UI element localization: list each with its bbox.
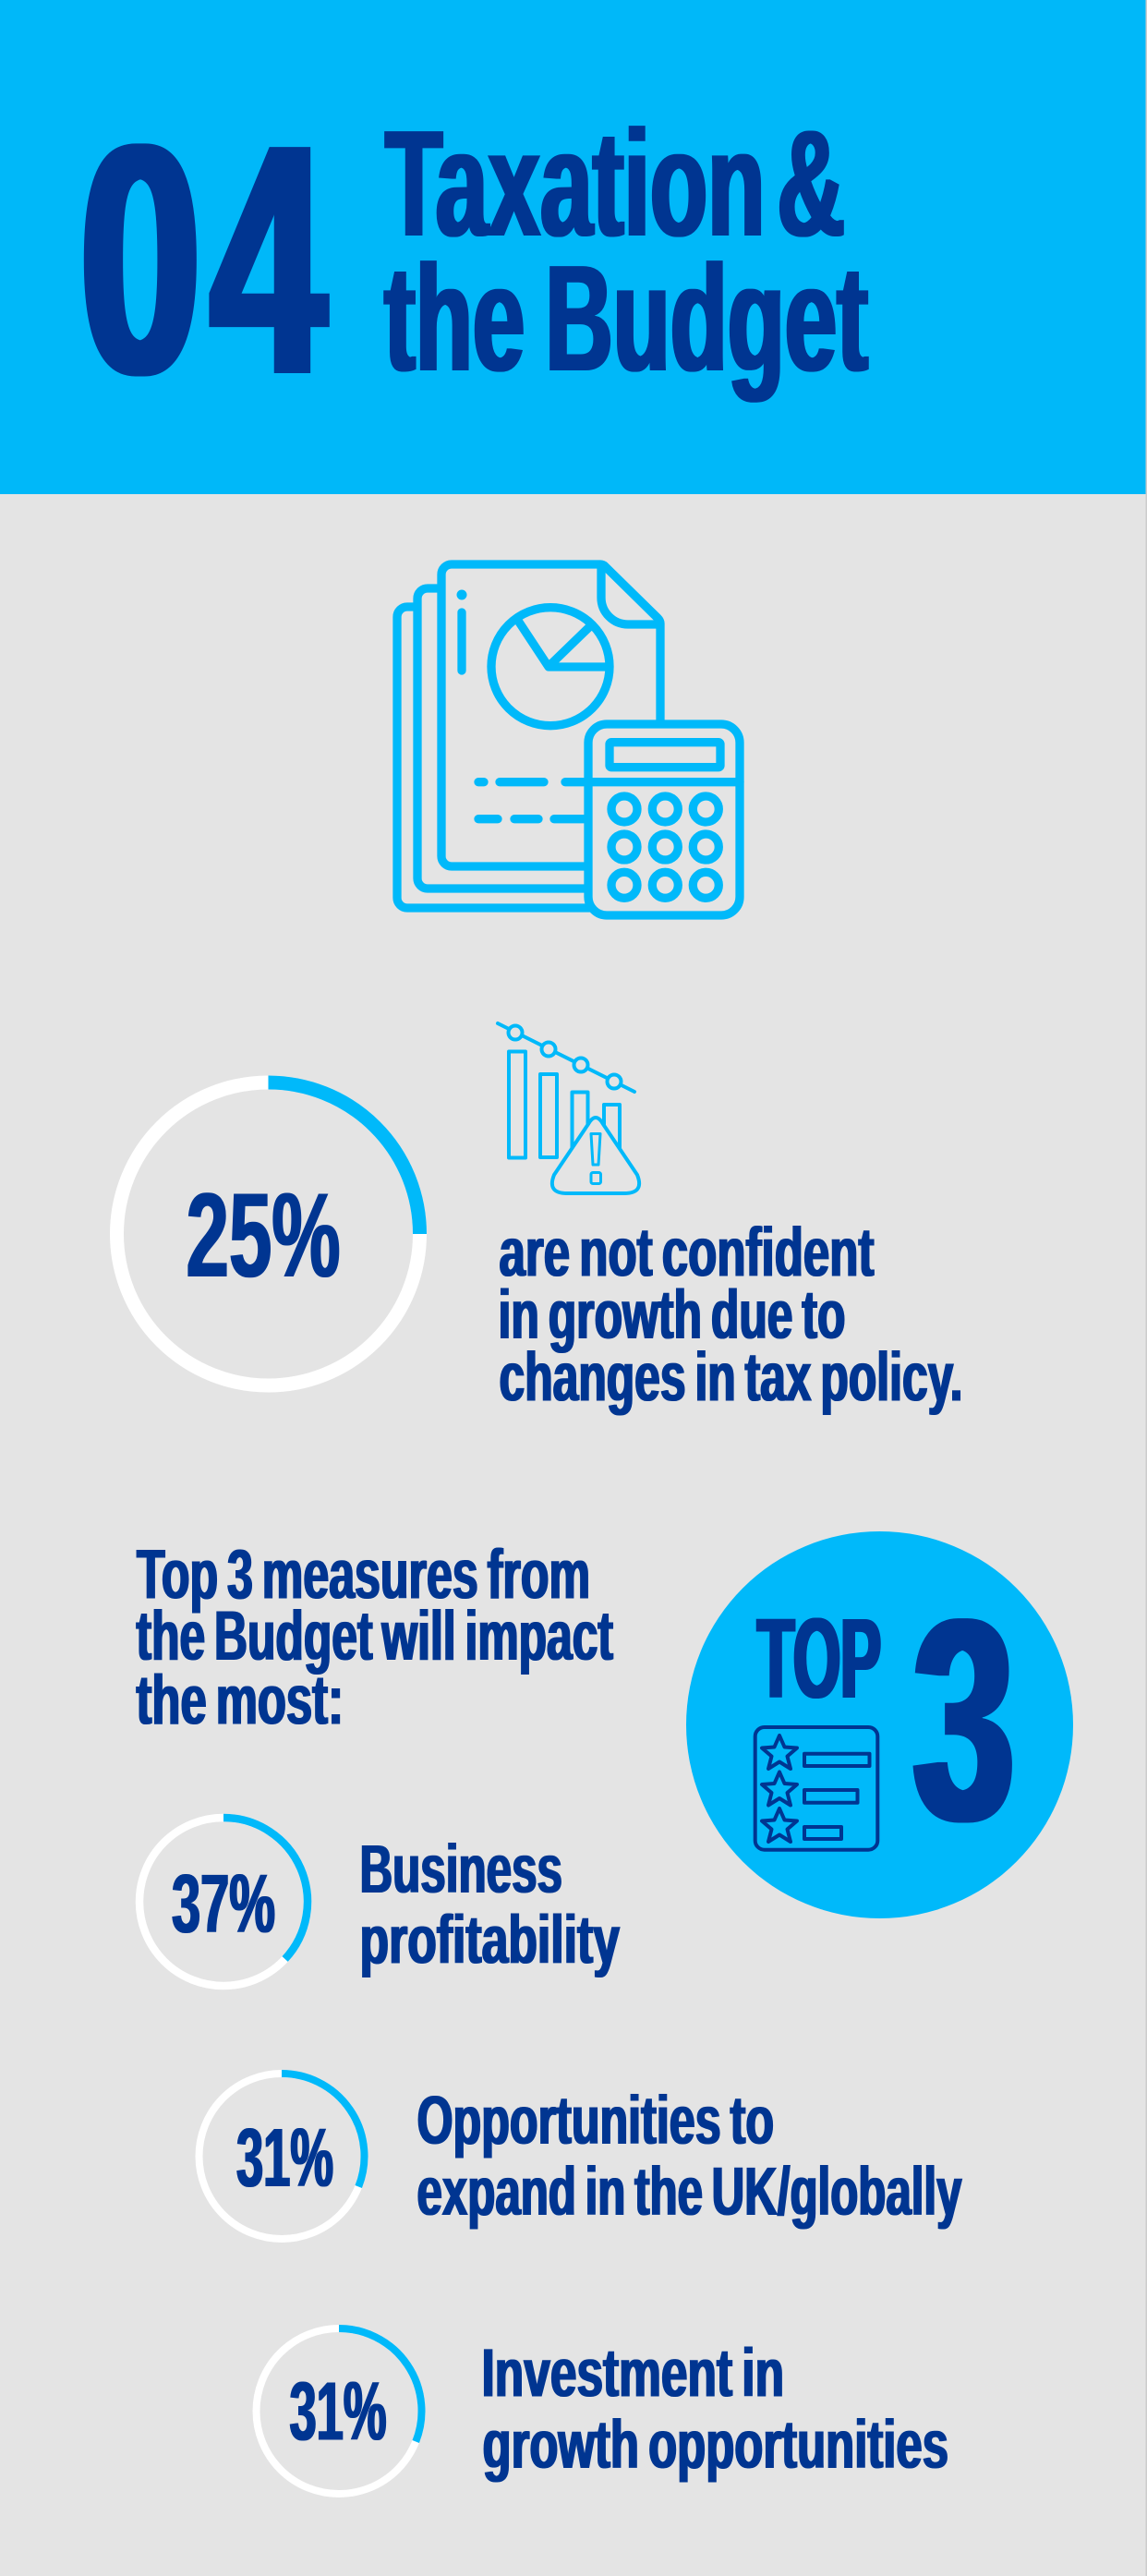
donut: 31% opportunities to expand: [199, 2074, 365, 2239]
label: business profitability: [360, 1831, 620, 1978]
stat value: 37%: [172, 1858, 275, 1951]
badge numeral: 3: [913, 1560, 1014, 1881]
heading: top 3 measures: the most:: [137, 1661, 344, 1740]
stat value: 31%: [290, 2366, 386, 2459]
icon: star rating list: [755, 1727, 877, 1850]
label: investment in growth: Investment in: [482, 2335, 784, 2411]
label: business profitability: profitability: [360, 1901, 620, 1978]
donut: 25%: [116, 1082, 419, 1385]
label: opportunities to expand: Opportunities to: [417, 2082, 774, 2159]
icon: falling chart with warning: [498, 1023, 639, 1193]
badge label: TOP: [757, 1596, 881, 1723]
label: investment in growth: growth opportunities: [482, 2406, 948, 2483]
stat value: 25%: [187, 1167, 340, 1302]
title: [384, 99, 868, 403]
donut: 37% business profitability: [139, 1818, 308, 1986]
header banner: [0, 0, 1145, 494]
label: opportunities to expand: [417, 2082, 962, 2230]
text: confidence statement: [499, 1214, 962, 1415]
icon: documents with pie chart and calculator: [397, 564, 740, 915]
section number: 4: [211, 77, 327, 443]
title: the Budget: [384, 234, 868, 403]
donut: 31% investment in growth: [257, 2328, 422, 2494]
text: confidence statement: in growth due to: [499, 1276, 846, 1353]
label: investment in growth: [482, 2335, 948, 2483]
heading: top 3 measures: Top 3 measures from: [137, 1535, 590, 1615]
badge: top 3: [686, 1531, 1073, 1918]
label: business profitability: Business: [360, 1831, 562, 1907]
stat value: 31%: [236, 2112, 333, 2205]
section number: 0: [79, 77, 201, 443]
text: confidence statement: are not confident: [499, 1214, 875, 1291]
heading: top 3 measures: [137, 1535, 613, 1740]
heading: top 3 measures: the Budget will impact: [137, 1597, 613, 1675]
title: Taxation &: [385, 99, 845, 268]
